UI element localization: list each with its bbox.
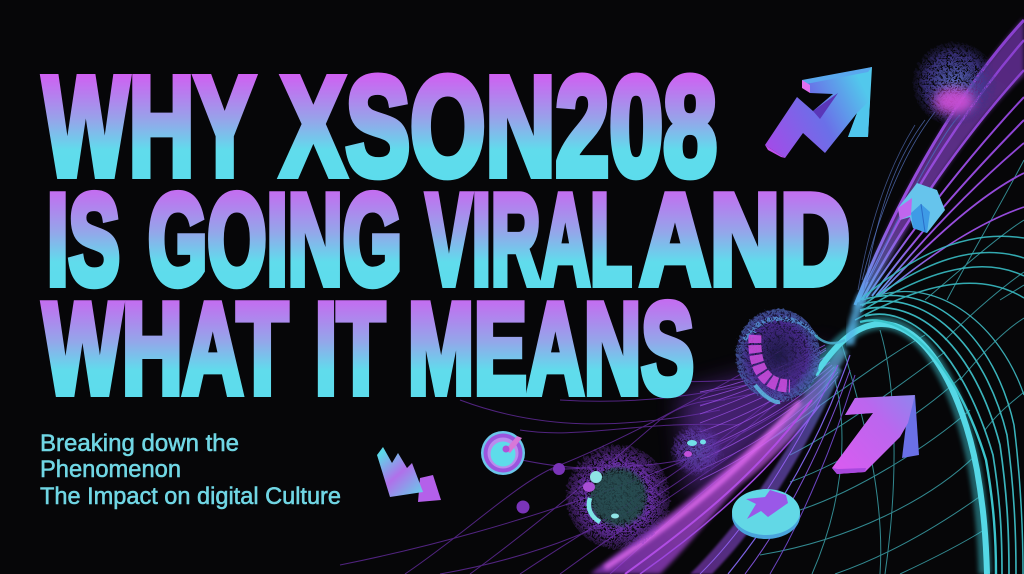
subtitle: Breaking down the bbox=[40, 430, 239, 457]
icon: diagonal arrow pink bbox=[832, 395, 919, 474]
network nodes bbox=[516, 463, 565, 514]
teal arch bbox=[800, 292, 1024, 574]
title line 2: GOING bbox=[148, 168, 402, 312]
title line 2: IS bbox=[47, 168, 120, 312]
title line 3: IT bbox=[315, 277, 385, 421]
title line 3: WHAT bbox=[43, 277, 288, 421]
title line 3: MEANS bbox=[408, 277, 694, 421]
network lines: faint purple lines from lower left bbox=[340, 345, 820, 574]
title line 1: XSON208 bbox=[281, 47, 717, 205]
purple haze behind mid blob bbox=[680, 345, 830, 500]
icon: rising zigzag arrow top bbox=[765, 67, 872, 158]
blob: top right particle cluster bbox=[913, 42, 997, 126]
icon: hexagonal badge bbox=[898, 183, 945, 233]
subtitle: Phenomenon bbox=[40, 456, 181, 483]
blob: lower dark teal sphere bbox=[566, 445, 670, 549]
icon: disc with lightning bbox=[732, 489, 800, 539]
title line 2: VIRAL bbox=[426, 168, 632, 312]
teal grid under and around arch bbox=[760, 160, 1024, 574]
icon: bar cursor shape bbox=[377, 447, 441, 502]
main diagonal beams bbox=[590, 345, 855, 574]
blob: upper small sphere with cyan patches bbox=[671, 424, 723, 476]
title line 3 bbox=[43, 277, 694, 421]
title bbox=[43, 47, 850, 421]
subtitle bbox=[40, 430, 341, 510]
subtitle: The Impact on digital Culture bbox=[40, 483, 341, 510]
title line 1 bbox=[43, 47, 717, 205]
blob: middle purple sphere bbox=[736, 309, 845, 402]
fine purple strands under the blob bbox=[700, 345, 838, 480]
title line 1: WHY bbox=[43, 47, 255, 205]
icon: circular target bbox=[481, 431, 525, 475]
title line 2: AND bbox=[640, 168, 850, 312]
upper purple fan bbox=[852, 18, 1024, 310]
outer teal arcs around upper arch bbox=[855, 236, 1024, 320]
title line 2 bbox=[47, 168, 850, 312]
